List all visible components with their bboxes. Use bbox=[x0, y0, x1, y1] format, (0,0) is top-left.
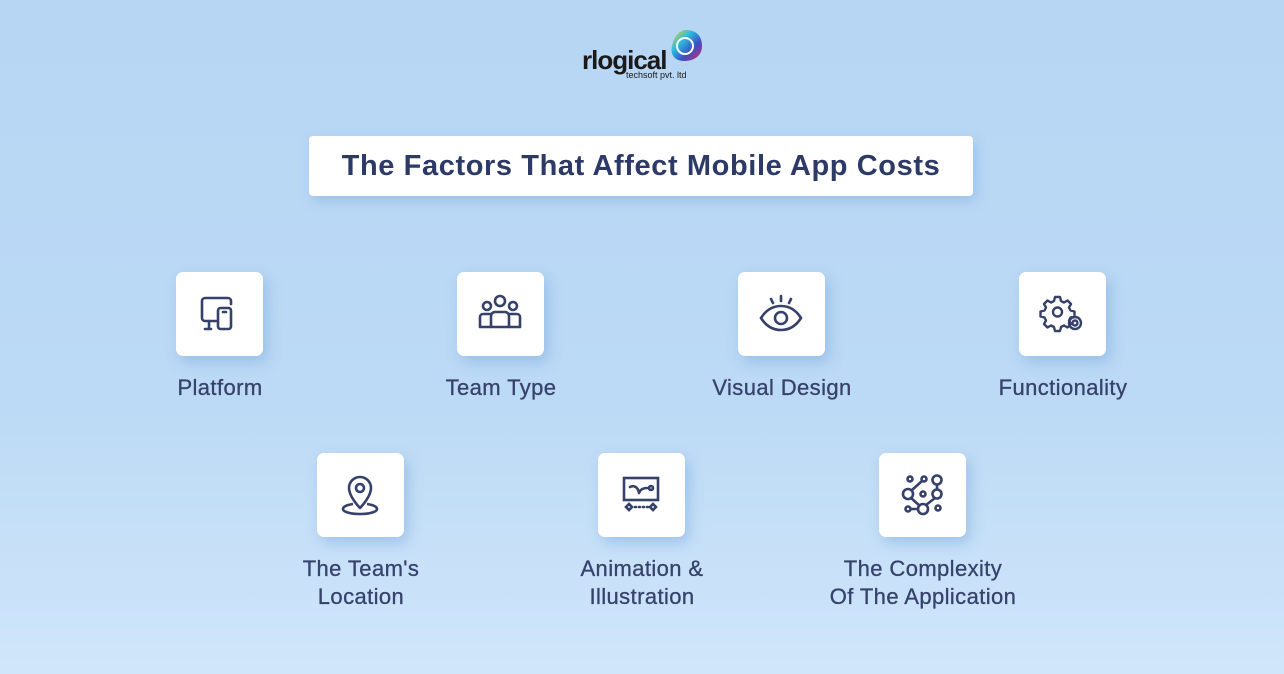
label: Platform: Platform bbox=[177, 375, 263, 400]
label: Animation & Illustration: Animation & bbox=[580, 556, 704, 581]
card: Platform bbox=[176, 272, 263, 356]
label: Team Type: Team Type bbox=[446, 375, 556, 400]
label: Animation & Illustration bbox=[580, 556, 704, 609]
title bbox=[309, 136, 973, 196]
label: The Team's Location: The Team's bbox=[303, 556, 419, 581]
logo bbox=[582, 30, 702, 80]
label: The Complexity Of The Application: Of The Application bbox=[830, 584, 1016, 609]
logo: techsoft pvt. ltd bbox=[626, 70, 687, 80]
label: The Complexity Of The Application: The Complexity bbox=[844, 556, 1002, 581]
label: Functionality: Functionality bbox=[999, 375, 1127, 400]
card: Animation & Illustration bbox=[598, 453, 685, 537]
logo: rlogical bbox=[582, 45, 666, 75]
card: Visual Design bbox=[738, 272, 825, 356]
title: The Factors That Affect Mobile App Costs bbox=[342, 150, 940, 182]
label: The Complexity Of The Application bbox=[830, 556, 1016, 609]
label: The Team's Location: Location bbox=[318, 584, 404, 609]
card: Team Type bbox=[457, 272, 544, 356]
card: The Team's Location bbox=[317, 453, 404, 537]
label: Animation & Illustration: Illustration bbox=[589, 584, 695, 609]
label: The Team's Location bbox=[303, 556, 419, 609]
card: The Complexity Of The Application bbox=[879, 453, 966, 537]
card: Functionality bbox=[1019, 272, 1106, 356]
label: Visual Design: Visual Design bbox=[712, 375, 852, 400]
